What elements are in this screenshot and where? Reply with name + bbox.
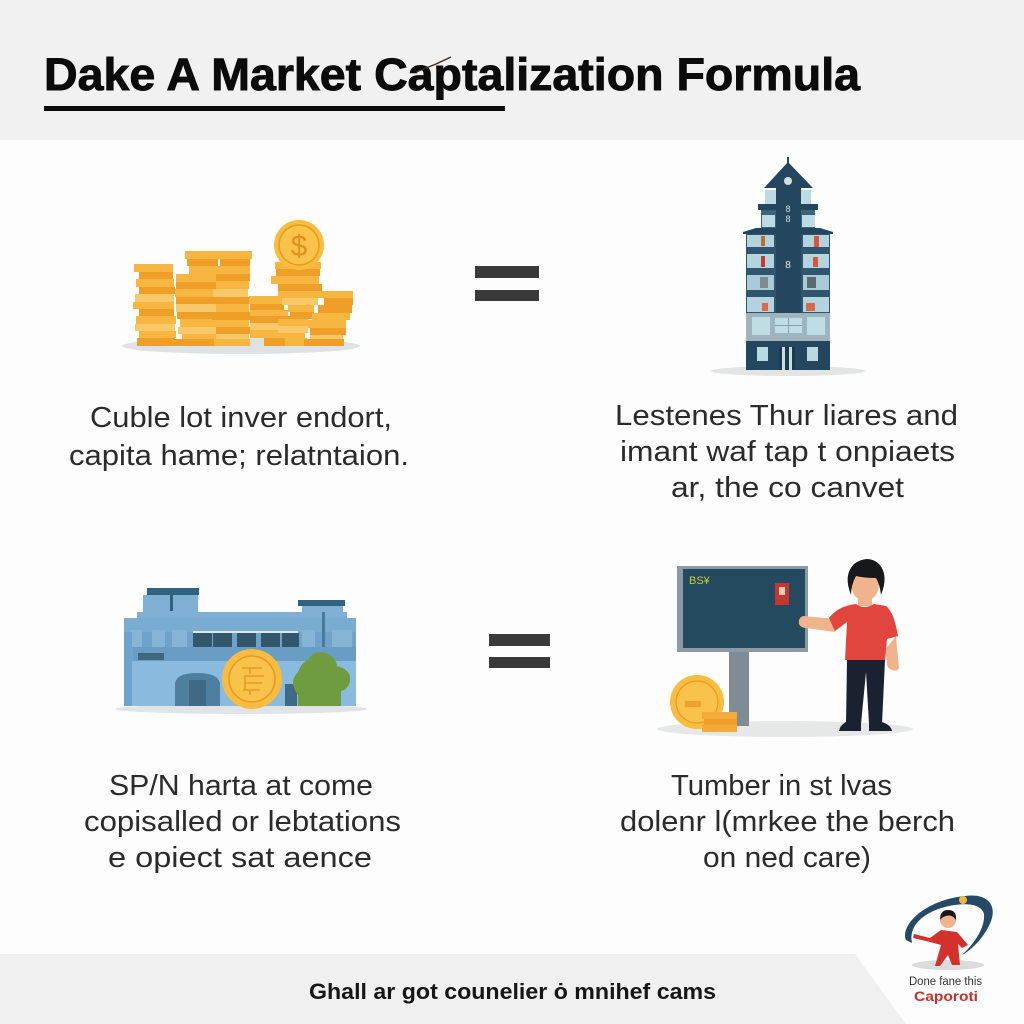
panel: bottom left building and coin <box>84 588 401 874</box>
equals sign: top <box>475 266 539 301</box>
caption: bottom left: e opiect sat aence <box>108 842 372 874</box>
caption: top right <box>615 400 958 504</box>
icon: person <box>799 559 899 731</box>
icon: coin stacks <box>122 220 360 354</box>
caption: bottom right: on ned care) <box>703 842 871 874</box>
footer band <box>0 954 906 1024</box>
panel: top left coins <box>69 220 409 472</box>
caption: top right: imant waf tap t onpiaets <box>620 436 955 468</box>
icon: tall building: 8 <box>785 214 791 224</box>
icon: coin and bars <box>670 675 737 732</box>
caption: top right: Lestenes Thur liares and <box>615 400 958 432</box>
caption: bottom right: Tumber in st lvas <box>671 770 892 802</box>
icon: tall building <box>711 157 865 376</box>
icon: green bush <box>293 652 350 706</box>
icon: billboard: BS¥ <box>689 575 711 587</box>
caption: bottom right: dolenr l(mrkee the berch <box>620 806 955 838</box>
icon: dollar coin: $ <box>291 230 308 263</box>
caption: bottom right <box>620 770 955 874</box>
icon: low blue building <box>115 588 367 714</box>
caption: top right: ar, the co canvet <box>671 472 904 504</box>
title glitch mark <box>416 57 451 72</box>
icon: dollar coin <box>274 220 324 270</box>
logo text: Done fane this <box>909 976 982 988</box>
footer text: Ghall ar got counelier ȯ mnihef cams <box>309 979 716 1004</box>
caption: bottom left: copisalled or lebtations <box>84 806 401 838</box>
caption: top left <box>69 402 409 472</box>
caption: bottom left <box>84 770 401 874</box>
icon: gold coin <box>222 649 282 709</box>
icon: orbit ring <box>905 895 993 955</box>
icon: mascot <box>913 910 968 966</box>
icon: tall building: 8 <box>785 260 791 271</box>
icon: billboard <box>677 566 808 726</box>
ground shadow <box>657 721 913 737</box>
equals sign: bottom <box>489 634 550 668</box>
icon: tall building: 8 <box>785 204 791 214</box>
title underline <box>44 106 505 111</box>
caption: bottom left: SP/N harta at come <box>109 770 373 802</box>
panel: bottom right presenter <box>620 559 955 874</box>
caption: top left: capita hame; relatntaion. <box>69 440 409 472</box>
panel: top right building <box>615 157 958 504</box>
logo name: Caporoti <box>914 988 978 1004</box>
header band with title <box>0 0 1024 140</box>
caption: top left: Cuble lot inver endort, <box>90 402 392 434</box>
title: Dake A Market Captalization Formula <box>44 49 861 100</box>
logo badge <box>905 895 993 1004</box>
